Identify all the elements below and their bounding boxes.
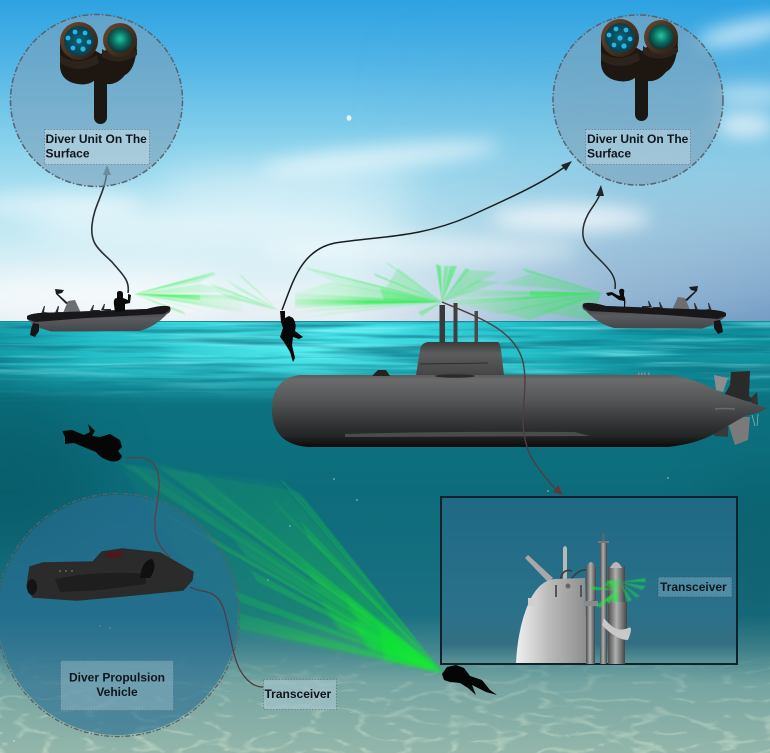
label: diver propulsion vehicle: Diver Propulsion [69, 670, 165, 684]
label: diver propulsion vehicle [60, 660, 174, 710]
clouds [0, 12, 770, 320]
cable: vehicle to transceiver label [190, 587, 263, 687]
sail and masts [416, 303, 504, 375]
cable: mast to inset [442, 302, 563, 495]
icon: diver unit right [601, 19, 678, 121]
beam upward from mast [436, 264, 500, 302]
right circle: diver unit on the surface [553, 15, 723, 185]
vehicle image [27, 549, 193, 600]
diver beam left [210, 274, 278, 310]
right boat with operator [582, 286, 726, 334]
operator silhouette right [606, 289, 625, 307]
surface beam group [134, 262, 602, 320]
label: diver unit [44, 130, 150, 164]
inset panel: transceiver on mast [441, 497, 737, 664]
green transceiver glow [590, 578, 646, 608]
beam from right boat [450, 268, 602, 320]
seabed diver [442, 665, 497, 695]
background: sky [0, 0, 770, 322]
cable: surface diver to right unit [282, 161, 572, 310]
hull [272, 375, 767, 447]
label: diver propulsion vehicle: Vehicle [96, 685, 138, 699]
large green light beam fan under water [118, 462, 442, 672]
label: transceiver lower [264, 680, 336, 710]
mast cluster [584, 533, 631, 664]
swimming diver with propulsion unit [62, 424, 122, 461]
left boat beam [134, 272, 243, 318]
label: diver unit right [586, 130, 690, 164]
operator silhouette [114, 291, 131, 312]
label: transceiver inset: Transceiver [660, 580, 727, 594]
sail close-up [516, 546, 590, 663]
label: transceiver inset [658, 577, 732, 597]
moon [347, 115, 351, 121]
left circle: diver unit on the surface [10, 14, 182, 186]
background: sea [0, 321, 770, 753]
icon: diver unit [60, 22, 137, 124]
label: transceiver lower: Transceiver [264, 687, 332, 701]
label: diver unit right: Diver Unit On The [587, 132, 689, 146]
submarine [272, 303, 767, 447]
cable: right boat to unit [583, 185, 615, 289]
beam from mast to left [290, 262, 442, 318]
diver propulsion vehicle circle [0, 494, 240, 736]
cable: diver to vehicle [126, 457, 170, 557]
label: diver unit right: Surface [587, 146, 631, 160]
left boat with operator [27, 289, 171, 337]
label: diver unit: Diver Unit On The [46, 132, 147, 146]
label: diver unit: Surface [46, 146, 90, 160]
diver at surface [280, 311, 303, 362]
cable: left boat to unit [92, 165, 128, 293]
tail fins [713, 371, 758, 445]
